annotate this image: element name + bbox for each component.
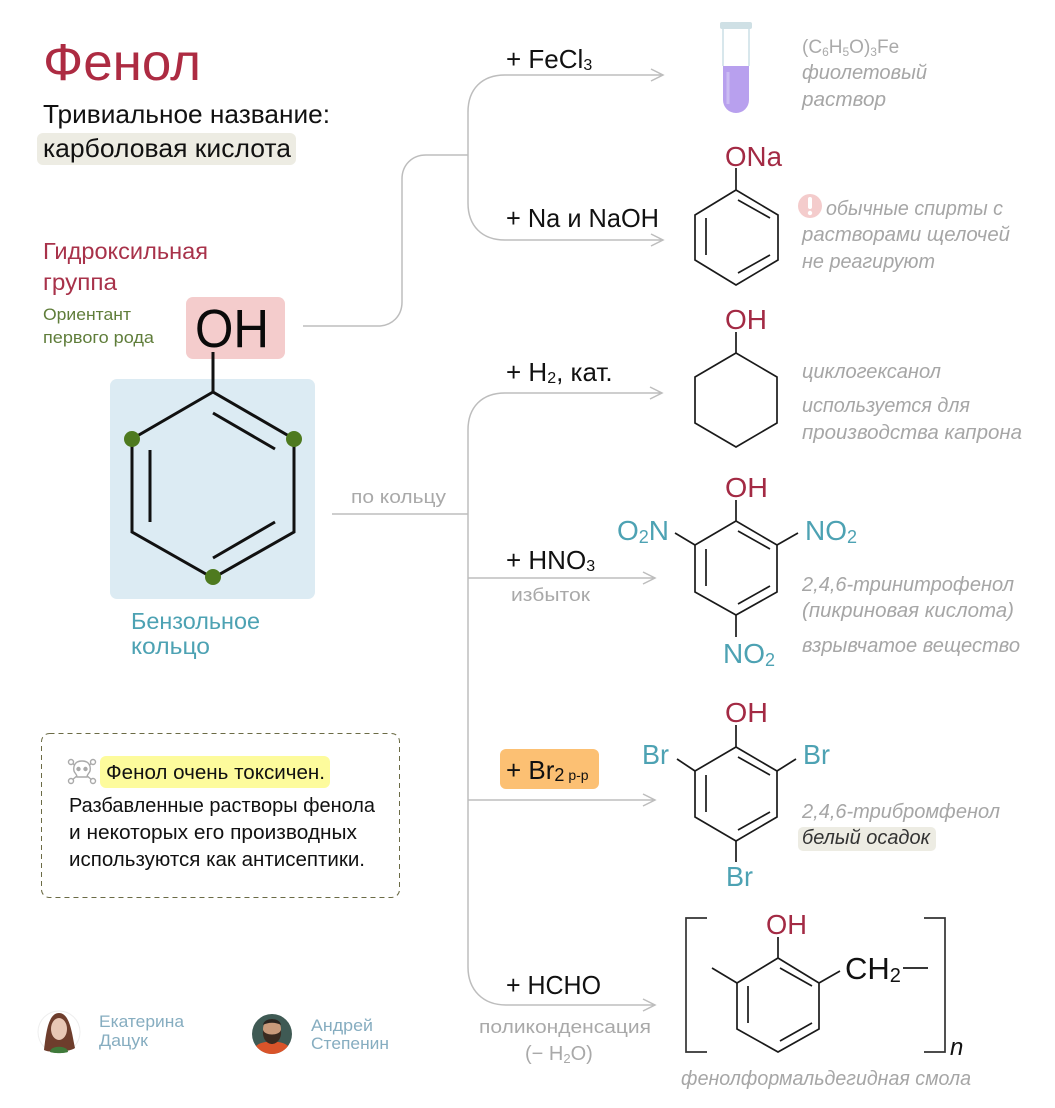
reagent: HNO3 excess xyxy=(506,545,595,605)
text: iron phenolate: H xyxy=(829,37,842,58)
reagent: HCHO polycondensation: (− H xyxy=(525,1043,563,1065)
structure: picric acid xyxy=(617,472,857,670)
reagent: HCHO polycondensation: 2 xyxy=(563,1051,571,1066)
callout: toxicity: Разбавленные растворы фенола xyxy=(69,795,376,817)
structure: phenol-formaldehyde resin: n xyxy=(950,1034,963,1061)
callout: toxicity: используются как антисептики. xyxy=(69,849,365,871)
label: ortho-para orientant: Ориентант xyxy=(43,306,131,324)
reagent: H2 catalyst: + H xyxy=(506,357,547,387)
icon: test tube with violet solution xyxy=(720,22,752,113)
author: Ekaterina Datsuk xyxy=(38,1011,185,1053)
text: tribromophenol: белый осадок xyxy=(802,827,932,849)
label: by ring: по кольцу xyxy=(351,487,446,507)
text: iron phenolate: 3 xyxy=(870,45,877,59)
author: Andrey Stepenin xyxy=(252,1014,389,1054)
text: cyclohexanol: производства капрона xyxy=(802,422,1022,444)
text: iron phenolate: раствор xyxy=(801,89,886,111)
arrow: to H2 product xyxy=(468,387,662,514)
text: iron phenolate: (C xyxy=(802,37,822,58)
structure: picric acid: 2 xyxy=(639,527,649,547)
reagent: HCHO polycondensation: + HCHO xyxy=(506,970,601,1000)
structure: sodium phenolate xyxy=(695,141,782,285)
panel: benzene ring background xyxy=(110,379,315,599)
text: iron phenolate: фиолетовый xyxy=(802,62,927,84)
structure: tribromophenol: OH xyxy=(725,697,768,728)
text: iron phenolate: 5 xyxy=(842,45,849,59)
text: cyclohexanol: циклогексанол xyxy=(802,361,941,383)
structure: phenol-formaldehyde resin: CH xyxy=(845,951,890,986)
structure: tribromophenol: Br xyxy=(642,739,669,770)
author: Andrey Stepenin: Степенин xyxy=(311,1035,389,1053)
author: Ekaterina Datsuk: Дацук xyxy=(99,1032,149,1050)
text: cyclohexanol xyxy=(802,361,1022,444)
label: benzene ring: Бензольное xyxy=(131,608,260,634)
subtitle: trivial name: карболовая кислота xyxy=(43,133,292,163)
arrow: to HCHO product xyxy=(468,514,655,1011)
reagent: H2 catalyst: , кат. xyxy=(556,357,613,387)
subtitle: trivial name xyxy=(37,99,330,165)
label: hydroxyl group xyxy=(43,238,208,295)
structure: picric acid: NO xyxy=(805,515,847,546)
reagent: bromine water: р-р xyxy=(564,767,589,783)
text: cyclohexanol: используется для xyxy=(802,395,970,417)
label: hydroxyl group: Гидроксильная xyxy=(43,238,208,264)
text: picric acid: (пикриновая кислота) xyxy=(802,600,1014,622)
arrow: to Br2 product xyxy=(468,794,655,806)
structure: sodium phenolate: ONa xyxy=(725,141,782,172)
structure: tribromophenol: Br xyxy=(726,861,753,892)
subtitle: trivial name: Тривиальное название: xyxy=(43,99,330,129)
author: Andrey Stepenin: Андрей xyxy=(311,1017,373,1035)
label: ortho-para orientant xyxy=(43,306,155,347)
structure: picric acid: O xyxy=(617,515,639,546)
structure: picric acid: N xyxy=(649,515,669,546)
callout: toxicity xyxy=(42,734,400,898)
title: Фенол xyxy=(43,34,201,92)
text: picric acid xyxy=(801,574,1020,657)
reagent: HNO3 excess: + HNO xyxy=(506,545,586,575)
reagent: bromine water: + Br xyxy=(506,755,554,785)
arrow: to FeCl3 product xyxy=(468,69,663,155)
text: tribromophenol: 2,4,6-трибромфенол xyxy=(801,801,1000,823)
structure: cyclohexanol xyxy=(695,304,777,447)
reagent: HCHO polycondensation xyxy=(479,970,651,1066)
label: benzene ring: кольцо xyxy=(131,633,210,659)
reagent: HCHO polycondensation: поликонденсация xyxy=(479,1017,651,1037)
arrow: to HNO3 product xyxy=(468,572,655,584)
reagent: HCHO polycondensation: O) xyxy=(571,1043,593,1065)
structure: tribromophenol: Br xyxy=(803,739,830,770)
text: resin name: фенолформальдегидная смола xyxy=(681,1068,971,1090)
phenol structural formula xyxy=(124,352,302,585)
reagent: bromine water: 2 xyxy=(554,765,564,785)
text: alcohols note: не реагируют xyxy=(802,251,935,273)
text: tribromophenol xyxy=(798,801,1000,851)
callout: toxicity: и некоторых его производных xyxy=(69,822,357,844)
reagent: HNO3 excess: избыток xyxy=(511,585,590,605)
callout: toxicity: Фенол очень токсичен. xyxy=(106,762,325,784)
author: Ekaterina Datsuk: Екатерина xyxy=(99,1013,185,1031)
text: iron phenolate: Fe xyxy=(877,37,899,58)
text: alcohols note: растворами щелочей xyxy=(801,224,1010,246)
text: iron phenolate xyxy=(801,37,927,111)
reagent: FeCl3: + FeCl xyxy=(506,44,583,74)
icon: skull xyxy=(68,760,96,784)
text: iron phenolate: 6 xyxy=(822,45,829,59)
hydroxyl group OH: OH xyxy=(195,299,269,359)
structure: picric acid: 2 xyxy=(847,527,857,547)
structure: picric acid: NO xyxy=(723,638,765,669)
structure: picric acid: OH xyxy=(725,472,768,503)
structure: cyclohexanol: OH xyxy=(725,304,767,335)
label: ortho-para orientant: первого рода xyxy=(43,329,155,347)
reagent: H2 catalyst: 2 xyxy=(547,370,556,387)
reagent: Na and NaOH: + Na и NaOH xyxy=(506,203,659,233)
text: picric acid: взрывчатое вещество xyxy=(802,635,1020,657)
structure: phenol-formaldehyde resin: 2 xyxy=(890,965,901,987)
text: iron phenolate: O) xyxy=(849,37,870,58)
arrow: to Na / NaOH product xyxy=(468,155,663,246)
connector: OH reactions xyxy=(303,155,468,326)
connector: ring reactions xyxy=(332,513,468,515)
label: hydroxyl group: группа xyxy=(43,269,117,295)
label: benzene ring xyxy=(131,608,260,659)
text: alcohols note: обычные спирты с xyxy=(826,198,1003,220)
reagent: bromine water xyxy=(500,749,599,789)
structure: picric acid: 2 xyxy=(765,650,775,670)
structure: phenol-formaldehyde resin xyxy=(686,909,963,1061)
text: picric acid: 2,4,6-тринитрофенол xyxy=(801,574,1014,596)
text: alcohols note xyxy=(801,198,1010,273)
icon: warning xyxy=(798,194,822,218)
structure: tribromophenol xyxy=(642,697,830,892)
reagent: FeCl3: 3 xyxy=(583,57,592,74)
structure: phenol-formaldehyde resin: OH xyxy=(766,909,807,940)
reagent: HNO3 excess: 3 xyxy=(586,558,595,575)
